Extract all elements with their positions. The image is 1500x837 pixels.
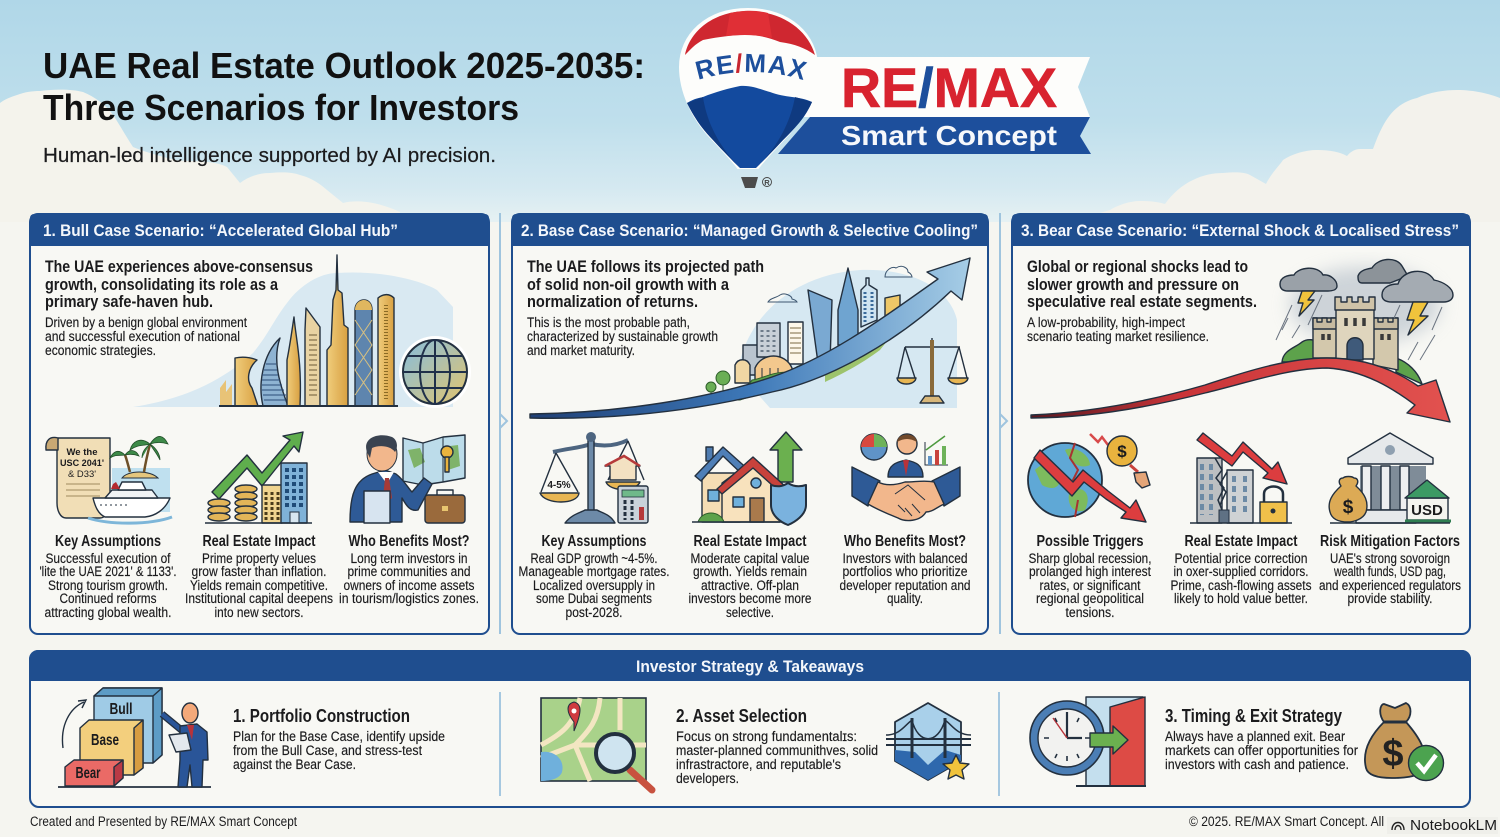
- real estate impact column: in oxer-supplied corridors.: [1174, 564, 1308, 579]
- real estate impact column: selective.: [726, 605, 774, 620]
- icon: bank, money bag and USD: $: [1343, 497, 1354, 518]
- panel connectors: [500, 213, 1007, 634]
- bear lead text: [1027, 258, 1257, 344]
- risk mitigation column: UAE's strong sovoroign: [1330, 551, 1450, 566]
- real estate impact column: [185, 533, 333, 620]
- possible triggers column: Sharp global recession,: [1028, 551, 1152, 566]
- panel: bear case: [1012, 214, 1470, 634]
- title: [43, 45, 645, 128]
- timing and exit text: 3. Timing & Exit Strategy: [1165, 706, 1342, 726]
- base lead text: [527, 258, 764, 358]
- real estate impact column: [1170, 533, 1312, 606]
- bull lead text: Driven by a benign global environment: [45, 315, 247, 330]
- logo: RE/MAX balloon and banner: Smart Concept: [841, 120, 1057, 151]
- icon: bull base bear blocks with presenter: Bear: [76, 765, 100, 782]
- subtitle: Human-led intelligence supported by AI precision.: [43, 145, 496, 167]
- risk mitigation column: [1319, 533, 1461, 606]
- bear lead text: scenario teating market resilience.: [1027, 329, 1209, 344]
- risk mitigation column: provide stability.: [1348, 591, 1432, 606]
- real estate impact column: investors become more: [688, 591, 812, 606]
- key assumptions column: Manageable mortgage rates.: [518, 564, 670, 579]
- who benefits column: in tourism/logistics zones.: [339, 591, 479, 606]
- portfolio construction text: [233, 706, 445, 772]
- possible triggers column: prolanged high interest: [1029, 564, 1151, 579]
- bull header: [30, 214, 489, 246]
- bull lead text: growth, consolidating its role as a: [45, 276, 279, 294]
- bear header: [1012, 214, 1470, 246]
- icon: scroll, island and cruise ship: & D33': [68, 469, 96, 480]
- bull lead text: [45, 258, 313, 358]
- icon: scroll, island and cruise ship: We the: [67, 447, 97, 458]
- icon: map and magnifier: [541, 698, 652, 790]
- asset selection text: infrastractore, and reputable's: [676, 757, 841, 772]
- real estate impact column: attractive. Off-plan: [701, 578, 799, 593]
- possible triggers column: tensions.: [1066, 605, 1114, 620]
- real estate impact column: Real Estate Impact: [202, 533, 316, 550]
- panel: base case: [512, 214, 988, 634]
- timing and exit text: Always have a planned exit. Bear: [1165, 729, 1345, 744]
- bear header: 3. Bear Case Scenario: “External Shock & Localised Stress”: [1021, 221, 1459, 240]
- who benefits column: owners of income assets: [344, 578, 475, 593]
- icon: handshake with investor, pie and bars: [852, 434, 960, 520]
- footer credit: Created and Presented by RE/MAX Smart Concept: [30, 814, 297, 829]
- icon: cracked globe with falling arrow and coin: $: [1117, 442, 1127, 461]
- base header: 2. Base Case Scenario: “Managed Growth & Selective Cooling”: [521, 221, 978, 240]
- icon: scroll, island and cruise ship: USC 2041': [60, 458, 104, 469]
- logo: RE/MAX balloon and banner: [679, 8, 1091, 188]
- strategy header: [29, 650, 1471, 681]
- who benefits column: quality.: [887, 591, 923, 606]
- title: Three Scenarios for Investors: [43, 87, 519, 128]
- timing and exit text: [1165, 706, 1358, 772]
- portfolio construction text: Plan for the Base Case, identify upside: [233, 729, 445, 744]
- title: UAE Real Estate Outlook 2025-2035:: [43, 45, 645, 86]
- icon: cracked buildings, lock and falling arrow: [1190, 433, 1292, 523]
- base lead text: The UAE follows its projected path: [527, 258, 764, 276]
- panel: bull case: [30, 214, 489, 634]
- who benefits column: [339, 533, 479, 606]
- portfolio construction text: 1. Portfolio Construction: [233, 706, 410, 726]
- icon: bull base bear blocks with presenter: [58, 688, 211, 787]
- bear lead text: Global or regional shocks lead to: [1027, 258, 1248, 276]
- illustration: castle under storm and falling arrow: [1031, 259, 1453, 422]
- icon: bridge hexagon and star: [886, 703, 971, 780]
- key assumptions column: Key Assumptions: [55, 533, 161, 550]
- base lead text: of solid non-oil growth with a: [527, 276, 730, 294]
- key assumptions column: post-2028.: [566, 605, 622, 620]
- icon: bull base bear blocks with presenter: Base: [91, 732, 119, 749]
- logo: RE/MAX balloon and banner: R: [764, 178, 770, 187]
- real estate impact column: Potential price correction: [1174, 551, 1308, 566]
- icon: clock and exit door: [1030, 697, 1146, 786]
- risk mitigation column: Risk Mitigation Factors: [1320, 533, 1460, 550]
- icon: bank, money bag and USD: [1329, 433, 1451, 523]
- portfolio construction text: from the Bull Case, and stress-test: [233, 743, 422, 758]
- base header: [512, 214, 988, 246]
- bear lead text: A low-probability, high-impect: [1027, 315, 1185, 330]
- real estate impact column: [688, 533, 812, 620]
- real estate impact column: grow faster than inflation.: [192, 564, 326, 579]
- base lead text: normalization of returns.: [527, 293, 698, 311]
- possible triggers column: [1028, 533, 1152, 620]
- who benefits column: Who Benefits Most?: [844, 533, 966, 550]
- timing and exit text: markets can offer opportunities for: [1165, 743, 1358, 758]
- panel: investor strategy and takeaways: [29, 650, 1471, 807]
- bull header: 1. Bull Case Scenario: “Accelerated Global Hub”: [43, 221, 398, 240]
- base lead text: This is the most probable path,: [527, 315, 690, 330]
- real estate impact column: Moderate capital value: [690, 551, 810, 566]
- real estate impact column: likely to hold value better.: [1174, 591, 1308, 606]
- icon: cracked globe with falling arrow and coin: [1028, 434, 1150, 522]
- base lead text: characterized by sustainable growth: [527, 329, 718, 344]
- key assumptions column: Localized oversupply in: [533, 578, 655, 593]
- real estate impact column: Institutional capital deepens: [185, 591, 333, 606]
- key assumptions column: some Dubai segments: [536, 591, 652, 606]
- logo: RE/MAX balloon and banner: RE/MAX: [695, 53, 808, 80]
- bull lead text: economic strategies.: [45, 343, 156, 358]
- real estate impact column: growth. Yields remain: [693, 564, 807, 579]
- icon: houses, up arrow and shield: [692, 432, 806, 525]
- real estate impact column: into new sectors.: [214, 605, 304, 620]
- real estate impact column: Prime, cash-flowing assets: [1170, 578, 1312, 593]
- bull card: [30, 214, 489, 634]
- risk mitigation column: wealth funds, USD pag,: [1333, 564, 1446, 579]
- possible triggers column: Possible Triggers: [1036, 533, 1144, 550]
- key assumptions column: Strong tourism growth.: [48, 578, 168, 593]
- timing and exit text: investors with cash and patience.: [1165, 757, 1349, 772]
- who benefits column: Who Benefits Most?: [348, 533, 470, 550]
- asset selection text: developers.: [676, 771, 739, 786]
- strategy card: [30, 651, 1470, 807]
- strategy header: Investor Strategy & Takeaways: [636, 657, 864, 676]
- key assumptions column: Continued reforms: [60, 591, 157, 606]
- real estate impact column: Yields remain competitive.: [190, 578, 328, 593]
- key assumptions column: Key Assumptions: [542, 533, 647, 550]
- key assumptions column: Real GDP growth ~4-5%.: [530, 551, 658, 566]
- illustration: golden skyline: [133, 255, 471, 408]
- who benefits column: prime communities and: [348, 564, 470, 579]
- key assumptions column: 'lite the UAE 2021' & 1133'.: [40, 564, 176, 579]
- who benefits column: [840, 533, 970, 606]
- icon: scales, house and calculator: [540, 432, 648, 523]
- who benefits column: Investors with balanced: [842, 551, 968, 566]
- who benefits column: Long term investors in: [350, 551, 468, 566]
- real estate impact column: Real Estate Impact: [1184, 533, 1298, 550]
- NotebookLM badge: NotebookLM: [1410, 817, 1497, 834]
- who benefits column: portfolios who prioritize: [842, 564, 968, 579]
- icon: scales, house and calculator: 4-5%: [547, 480, 571, 491]
- key assumptions column: attracting global wealth.: [44, 605, 172, 620]
- real estate impact column: Prime property velues: [202, 551, 316, 566]
- asset selection text: [676, 706, 878, 786]
- portfolio construction text: against the Bear Case.: [233, 757, 356, 772]
- who benefits column: developer reputation and: [840, 578, 970, 593]
- footer copyright: © 2025. RE/MAX Smart Concept. All: [1189, 814, 1384, 829]
- icon: money bag with check: [1365, 703, 1444, 780]
- real estate impact column: Real Estate Impact: [694, 533, 807, 550]
- key assumptions column: [518, 533, 670, 620]
- bull lead text: The UAE experiences above-consensus: [45, 258, 313, 276]
- asset selection text: 2. Asset Selection: [676, 706, 807, 726]
- icon: money bag with check: $: [1382, 733, 1404, 775]
- possible triggers column: regional geopolitical: [1036, 591, 1144, 606]
- base lead text: and market maturity.: [527, 343, 635, 358]
- icon: scroll, island and cruise ship: [46, 436, 172, 523]
- possible triggers column: rates, or significant: [1040, 578, 1141, 593]
- asset selection text: Focus on strong fundamentalɪs:: [676, 729, 857, 744]
- risk mitigation column: and experienced regulators: [1319, 578, 1461, 593]
- base card: [512, 214, 988, 634]
- bear lead text: speculative real estate segments.: [1027, 293, 1257, 311]
- illustration: city on rising arrow with scales: [530, 258, 970, 418]
- icon: investor with map and briefcase: [350, 435, 465, 523]
- icon: bull base bear blocks with presenter: Bull: [110, 701, 132, 718]
- asset selection text: master-planned communithves, solid: [676, 743, 878, 758]
- bull lead text: and successful execution of national: [45, 329, 240, 344]
- bull lead text: primary safe-haven hub.: [45, 293, 213, 311]
- bear lead text: slower growth and pressure on: [1027, 276, 1239, 294]
- key assumptions column: [40, 533, 176, 620]
- key assumptions column: Successful execution of: [46, 551, 171, 566]
- logo: RE/MAX balloon and banner: RE/MAX: [841, 56, 1057, 119]
- bear card: [1012, 214, 1470, 634]
- icon: coins, buildings and rising arrow: [205, 432, 312, 523]
- icon: bank, money bag and USD: USD: [1411, 502, 1443, 519]
